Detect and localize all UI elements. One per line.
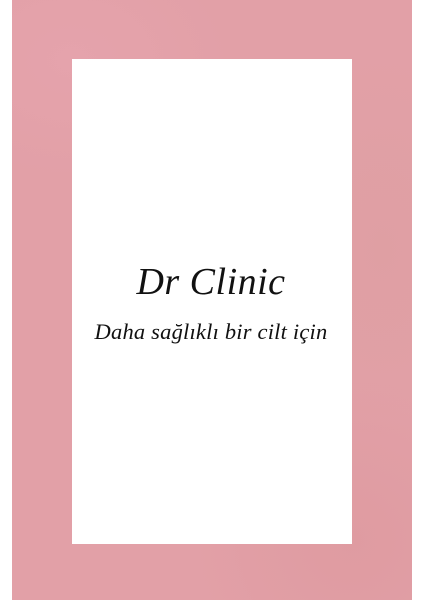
tagline: Daha sağlıklı bir cilt için [95, 319, 327, 344]
title: Dr Clinic [136, 261, 286, 303]
panel: white card [72, 59, 352, 544]
